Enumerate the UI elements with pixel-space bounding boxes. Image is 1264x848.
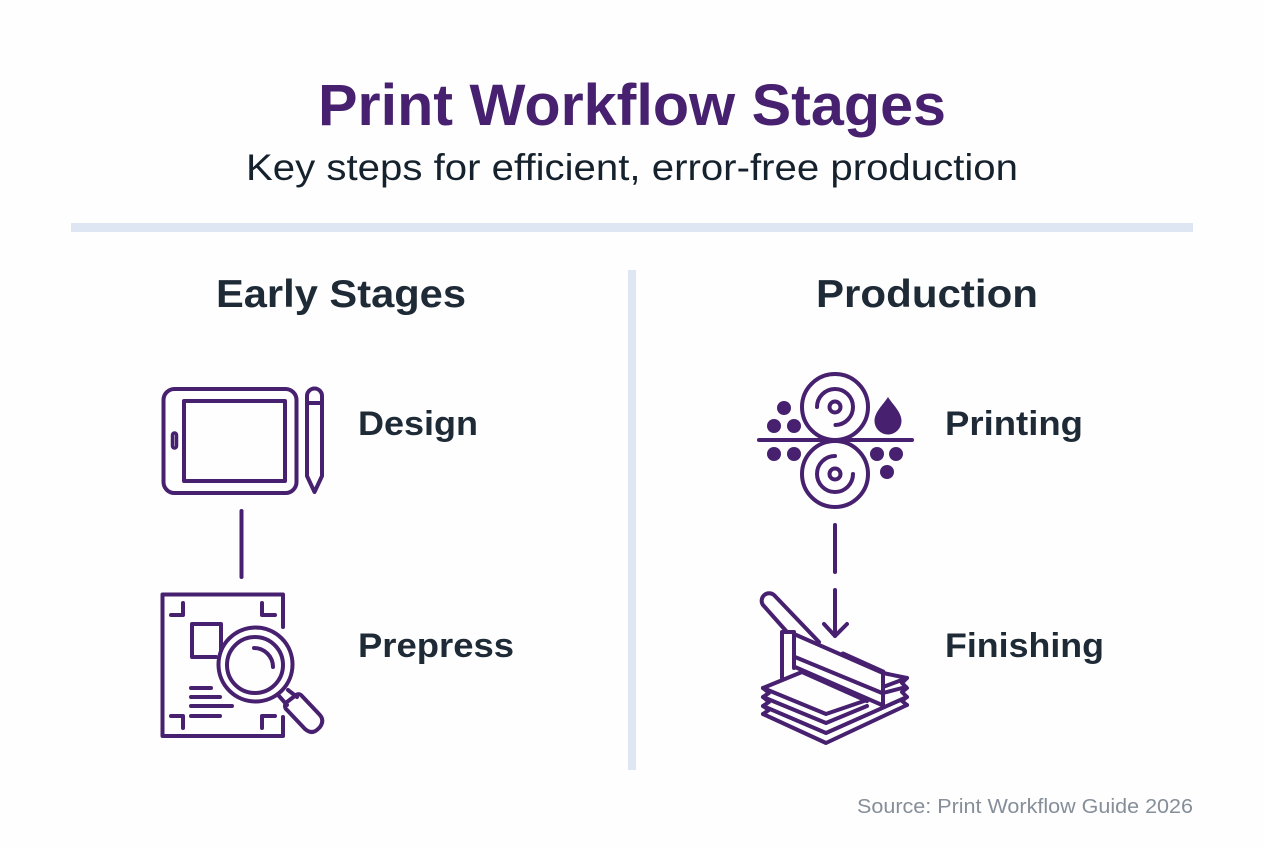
icon: tablet and stylus bbox=[164, 389, 322, 493]
panel: production bbox=[759, 273, 1104, 743]
label: printing: Printing bbox=[945, 405, 1083, 443]
label: design: Design bbox=[358, 405, 478, 443]
label: prepress: Prepress bbox=[358, 627, 514, 665]
label: finishing: Finishing bbox=[945, 627, 1104, 665]
connector: design to prepress bbox=[240, 511, 244, 577]
icon: prepress page with magnifier bbox=[162, 594, 322, 736]
connector: printing to finishing bbox=[833, 525, 837, 572]
icon: printing rollers bbox=[759, 374, 912, 507]
title: Print Workflow Stages bbox=[318, 73, 946, 138]
source note: Source: Print Workflow Guide 2026 bbox=[857, 795, 1193, 818]
subtitle: Key steps for efficient, error-free production bbox=[246, 147, 1018, 188]
heading: early stages: Early Stages bbox=[216, 273, 466, 316]
arrow: into finishing bbox=[824, 590, 847, 636]
heading: production: Production bbox=[816, 273, 1038, 316]
icon: finishing guillotine and paper stack bbox=[762, 593, 907, 743]
panel: early stages bbox=[162, 273, 514, 736]
